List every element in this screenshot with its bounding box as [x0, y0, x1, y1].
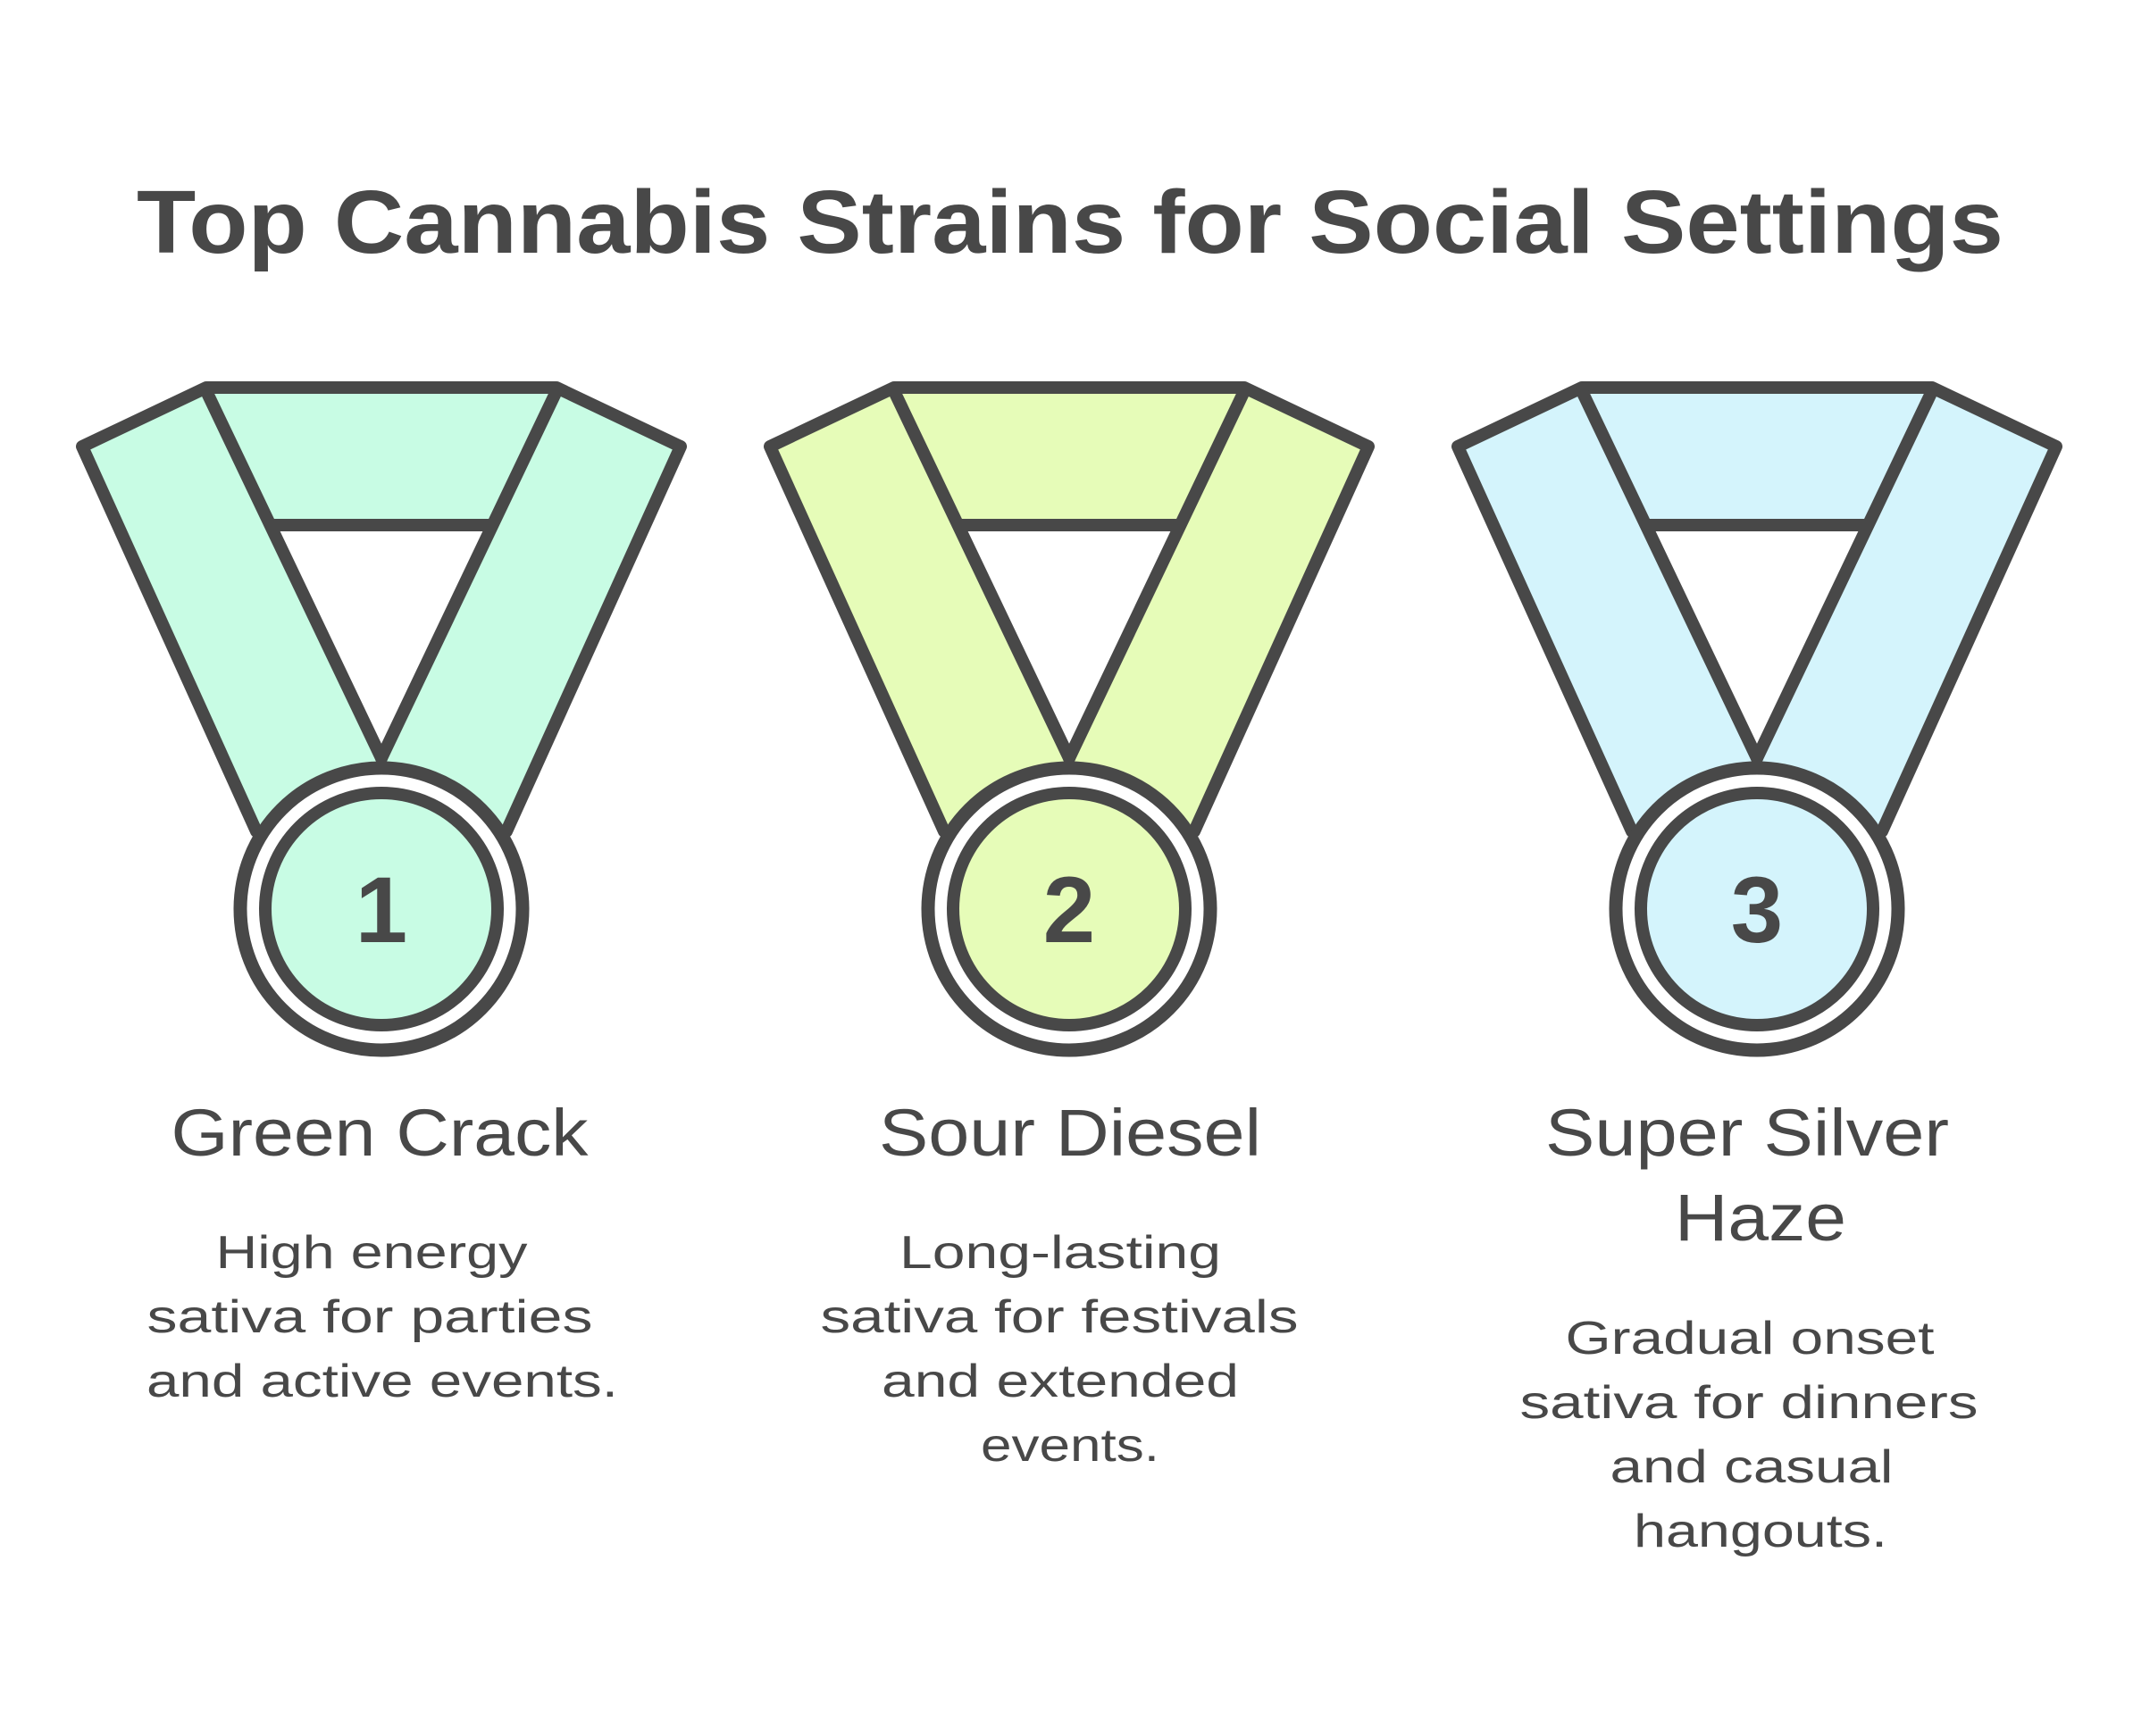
- label: Green Crack: and active events.: [146, 1356, 618, 1407]
- label: Super Silver Haze: sativa for dinners: [1520, 1377, 1978, 1429]
- number 2: 2: [1043, 858, 1095, 963]
- label: Sour Diesel: Long-lasting: [899, 1227, 1221, 1279]
- label: Super Silver Haze: hangouts.: [1634, 1506, 1887, 1557]
- label: Sour Diesel: events.: [981, 1420, 1159, 1472]
- number 3: 3: [1731, 858, 1783, 963]
- label: Green Crack: [146, 1096, 618, 1407]
- label: Super Silver Haze: Gradual onset: [1565, 1313, 1935, 1365]
- label: Super Silver Haze: and casual: [1610, 1441, 1894, 1493]
- label: Green Crack: Green Crack: [171, 1096, 590, 1170]
- title: Top Cannabis Strains for Social Settings: [137, 172, 2003, 272]
- label: Super Silver Haze: Haze: [1675, 1181, 1846, 1255]
- label: Sour Diesel: and extended: [882, 1356, 1239, 1407]
- label: Super Silver Haze: [1520, 1096, 1978, 1557]
- medal 2: Sour Diesel: [770, 388, 1368, 1050]
- medal 1: Green Crack: [82, 388, 681, 1050]
- label: Green Crack: sativa for parties: [146, 1291, 593, 1343]
- label: Sour Diesel: sativa for festivals: [820, 1291, 1299, 1343]
- label: Sour Diesel: Sour Diesel: [879, 1096, 1261, 1170]
- number 1: 1: [356, 858, 407, 963]
- medal 3: Super Silver Haze: [1458, 388, 2056, 1050]
- label: Sour Diesel: [820, 1096, 1299, 1472]
- label: Super Silver Haze: Super Silver: [1545, 1096, 1949, 1170]
- label: Green Crack: High energy: [216, 1227, 527, 1279]
